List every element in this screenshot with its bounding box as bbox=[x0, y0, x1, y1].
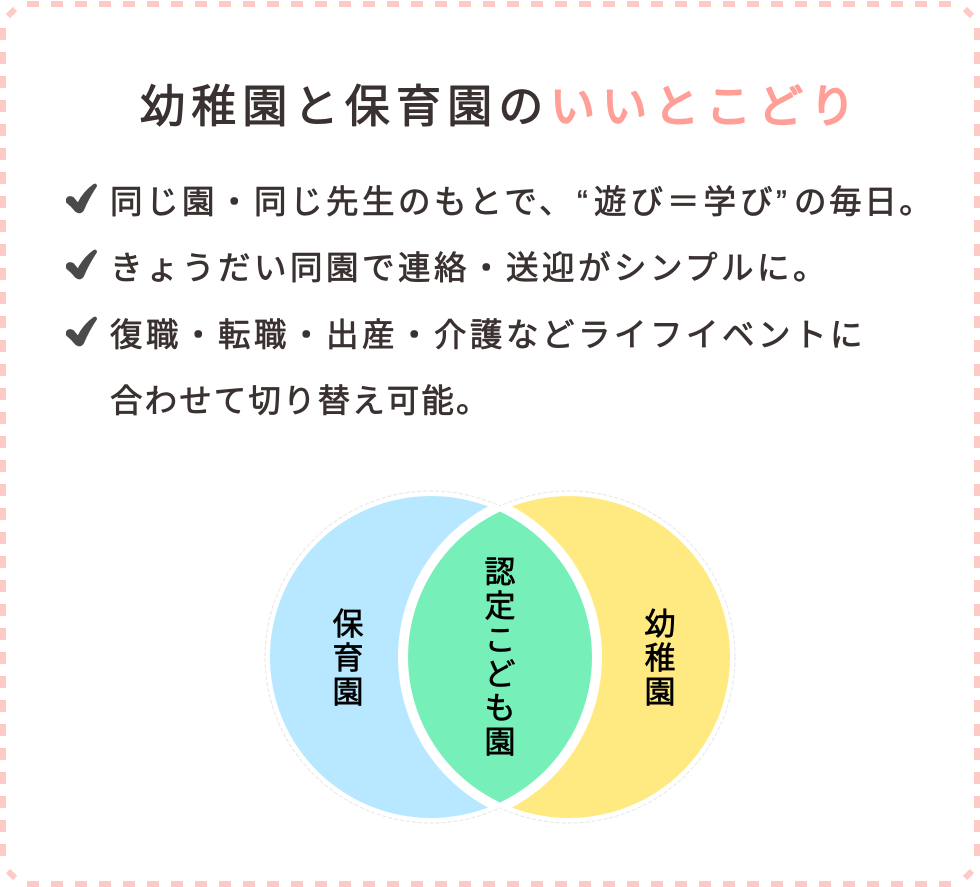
title: いいとこどり bbox=[550, 70, 862, 135]
list item 1: “ bbox=[577, 184, 588, 220]
list item 1: 同じ園・同じ先生のもとで、 bbox=[110, 176, 575, 223]
list item 1: ” bbox=[776, 184, 787, 220]
overlap: certified centre bbox=[408, 512, 592, 802]
list item 3 bbox=[67, 309, 866, 422]
list item 1: の毎日。 bbox=[794, 176, 934, 223]
outer thin outlines bbox=[265, 491, 735, 823]
label: 保育園 bbox=[332, 599, 364, 712]
circle: kindergarten bbox=[512, 496, 730, 818]
list item 2: きょうだい同園で連絡・送迎がシンプルに。 bbox=[110, 242, 829, 289]
label: 認定こども園: ど bbox=[484, 649, 516, 694]
venn diagram bbox=[265, 491, 735, 823]
icon: check mark bbox=[67, 185, 96, 212]
list item 3: 合わせて切り替え可能。 bbox=[110, 375, 491, 422]
list item 3: 復職・転職・出産・介護などライフイベントに bbox=[110, 309, 866, 356]
label: 認定こども園: 認 bbox=[484, 547, 516, 592]
label: 幼稚園 bbox=[644, 599, 676, 712]
checklist bbox=[67, 176, 934, 422]
title: 幼稚園と保育園の bbox=[140, 70, 550, 135]
list item 1 bbox=[67, 176, 934, 223]
label: 幼稚園: 幼 bbox=[644, 599, 676, 644]
label: 認定こども園: 定 bbox=[484, 581, 516, 626]
label: 保育園: 育 bbox=[332, 633, 364, 678]
label: 認定こども園: こ bbox=[484, 615, 516, 660]
list item 1: 遊び＝学び bbox=[594, 176, 777, 223]
label: 保育園: 保 bbox=[332, 599, 364, 644]
label: 認定こども園: も bbox=[484, 683, 516, 728]
icon: check mark bbox=[67, 251, 96, 278]
label: 認定こども園 bbox=[484, 547, 516, 762]
circle: nursery school bbox=[270, 496, 488, 818]
icon: check mark bbox=[67, 318, 96, 345]
title bbox=[140, 70, 862, 135]
label: 幼稚園: 園 bbox=[644, 667, 676, 712]
label: 認定こども園: 園 bbox=[484, 717, 516, 762]
label: 保育園: 園 bbox=[332, 667, 364, 712]
label: 幼稚園: 稚 bbox=[644, 633, 676, 678]
